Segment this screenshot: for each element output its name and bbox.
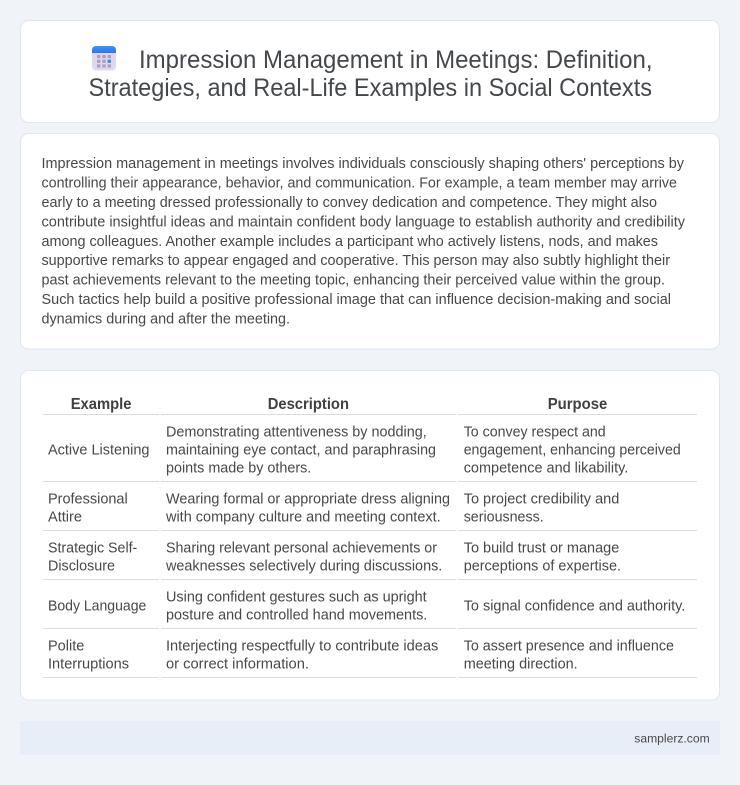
table row: Body Language — [43, 590, 697, 629]
title: Impression Management in Meetings: Definition, — [139, 47, 652, 74]
table row: Polite Interruptions — [43, 639, 697, 678]
table header row — [43, 396, 697, 415]
table row: Active Listening — [43, 425, 697, 482]
table row: Professional Attire: Professional — [48, 491, 128, 507]
table row: Body Language: To signal confidence and authority. — [464, 599, 685, 615]
table row: Polite Interruptions: Interruptions — [48, 657, 129, 673]
table row: Active Listening: Active Listening — [48, 443, 150, 459]
panel: title header — [20, 20, 720, 122]
table row: Strategic Self-Disclosure: Disclosure — [48, 559, 115, 575]
text block: introduction paragraph: contribute insightful ideas and maintain confident body language to establish authority and credibility — [42, 214, 686, 230]
table header row: Purpose — [548, 396, 608, 413]
table row: Strategic Self-Disclosure: Sharing relevant personal achievements or — [166, 541, 437, 557]
text block: introduction paragraph: dynamics during and after the meeting. — [42, 312, 290, 328]
text block: introduction paragraph: Such tactics help build a positive professional image that can influence decision-making and social — [42, 292, 671, 308]
text block: introduction paragraph — [42, 156, 686, 328]
table row: Professional Attire: Wearing formal or appropriate dress aligning — [166, 491, 450, 507]
text block: introduction paragraph: past achievements relevant to the meeting topic, enhancing their perceived value within the group. — [42, 273, 665, 289]
table row: Active Listening: points made by others. — [166, 461, 311, 477]
title: Strategies, and Real-Life Examples in Social Contexts — [88, 75, 652, 102]
text block: introduction paragraph: Impression management in meetings involves individuals consciously shaping others' perceptions by — [42, 156, 685, 172]
table row: Polite Interruptions: meeting direction. — [464, 657, 578, 673]
table row: Professional Attire: Attire — [48, 509, 82, 525]
table row: Active Listening: To convey respect and — [464, 425, 606, 441]
title — [88, 47, 652, 102]
panel: introduction — [20, 134, 720, 349]
table header row: Example — [71, 396, 132, 413]
icon: calendar — [92, 46, 116, 70]
table row: Active Listening: competence and likability. — [464, 461, 628, 477]
text block: introduction paragraph: supportive remarks to appear engaged and cooperative. This person may also subtly highlight their — [42, 253, 670, 269]
table row: Professional Attire — [43, 491, 697, 531]
table row: Professional Attire: To project credibility and — [464, 491, 619, 507]
table row: Polite Interruptions: Polite — [48, 639, 84, 655]
table header row: Description — [268, 396, 349, 413]
footer — [20, 721, 720, 755]
footer source text: samplerz.com — [634, 731, 710, 745]
text block: introduction paragraph: early to a meeting dressed professionally to convey dedication and competence. They might also — [42, 195, 657, 211]
table row: Strategic Self-Disclosure — [43, 541, 697, 580]
text block: introduction paragraph: controlling their appearance, behavior, and communication. For example, a team member may arrive — [42, 175, 677, 191]
table row: Active Listening: maintaining eye contact, and paraphrasing — [166, 443, 436, 459]
table row: Body Language: Body Language — [48, 599, 146, 615]
table row: Professional Attire: with company culture and meeting context. — [165, 509, 441, 525]
table row: Body Language: Using confident gestures such as upright — [166, 590, 427, 606]
table row: Strategic Self-Disclosure: To build trust or manage — [464, 541, 619, 557]
table row: Polite Interruptions: To assert presence and influence — [464, 639, 674, 655]
table row: Strategic Self-Disclosure: Strategic Self- — [48, 541, 137, 557]
table row: Strategic Self-Disclosure: perceptions of expertise. — [464, 559, 621, 575]
table row: Active Listening: engagement, enhancing perceived — [464, 443, 681, 459]
text block: introduction paragraph: among colleagues. Another example includes a participant who actively listens, nods, and makes — [42, 234, 658, 250]
table row: Polite Interruptions: Interjecting respectfully to contribute ideas — [166, 639, 438, 655]
table row: Active Listening: Demonstrating attentiveness by nodding, — [166, 425, 427, 441]
table row: Polite Interruptions: or correct information. — [166, 657, 309, 673]
table row: Body Language: posture and controlled hand movements. — [166, 608, 427, 624]
panel: examples table — [20, 370, 720, 700]
table row: Strategic Self-Disclosure: weaknesses selectively during discussions. — [165, 559, 442, 575]
table row: Professional Attire: seriousness. — [464, 509, 544, 525]
